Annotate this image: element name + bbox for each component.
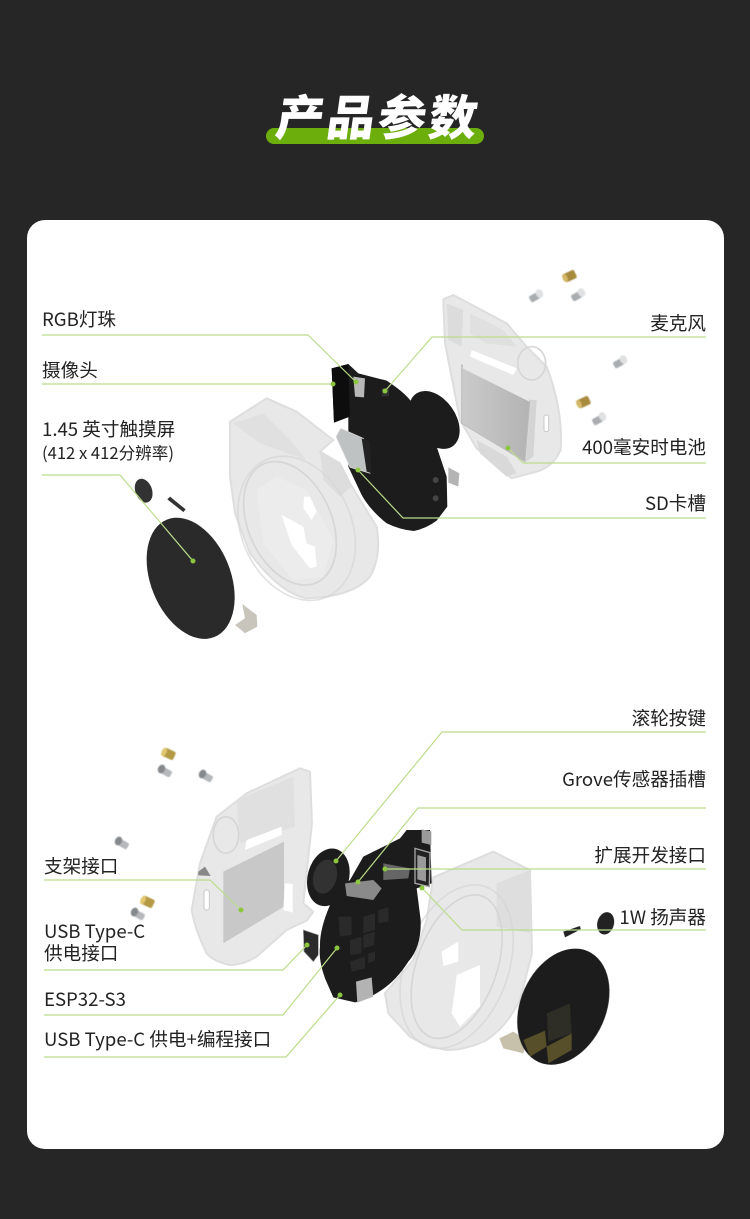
callout: 摄像头 <box>42 356 336 386</box>
icon: Grove connector <box>345 880 382 900</box>
icon: flex bracket <box>499 1032 527 1053</box>
callout: USB Type-C 供电+编程接口: USB Type-C 供电+编程接口 <box>44 1025 271 1052</box>
title: 产品参数 <box>272 79 486 149</box>
icon: speaker <box>415 848 430 887</box>
callout: 滚轮按键 <box>334 704 706 864</box>
callout: USB Type-C 供电接口 <box>44 917 310 970</box>
callout: 扩展开发接口 <box>382 841 706 872</box>
panel: white card <box>27 220 724 1149</box>
icon: flex bracket <box>235 604 257 633</box>
callout: USB Type-C 供电接口: 供电接口 <box>44 939 118 966</box>
icon: expansion header <box>383 863 410 880</box>
back shell: top assembly <box>443 295 561 478</box>
callout: 1W 扬声器 <box>420 886 706 930</box>
circuit board: bottom assembly <box>301 829 432 1003</box>
callout: 触摸屏: (412 x 412分辨率) <box>42 440 174 464</box>
callout: ESP32-S3 <box>44 946 340 1015</box>
front shell: bottom assembly <box>379 852 534 1064</box>
callout: RGB灯珠: RGB灯珠 <box>42 305 116 332</box>
icon: USB-C top connector <box>356 977 373 1003</box>
callout: SD卡槽 <box>356 468 706 518</box>
back shell: bottom assembly <box>192 768 313 965</box>
icon: battery <box>462 365 530 462</box>
callout: USB Type-C 供电+编程接口 <box>44 992 342 1057</box>
callout: 触摸屏 <box>42 415 196 564</box>
icon: RGB LED <box>353 377 365 397</box>
circuit board: top assembly <box>332 364 470 531</box>
callout: 400毫安时电池 <box>506 433 706 463</box>
callout: 麦克风 <box>382 309 706 394</box>
callout: USB Type-C 供电接口: USB Type-C <box>44 917 145 944</box>
front shell: top assembly <box>216 398 378 619</box>
display disc group <box>130 476 257 652</box>
display disc: bottom assembly <box>499 910 627 1079</box>
callout: ESP32-S3: ESP32-S3 <box>44 985 126 1012</box>
icon: SD card slot <box>336 428 370 473</box>
callout: 支架接口: 支架接口 <box>44 852 118 879</box>
callout: 扩展开发接口: 扩展开发接口 <box>594 841 706 868</box>
callout: Grove传感器插槽 <box>356 765 706 884</box>
title highlight bar <box>266 128 484 144</box>
callout: 麦克风: 麦克风 <box>650 309 706 336</box>
callout: 滚轮按键: 滚轮按键 <box>632 704 706 731</box>
callout: RGB灯珠 <box>42 305 358 384</box>
callout: 支架接口 <box>44 852 244 912</box>
icon: battery seen through shell <box>223 842 284 943</box>
screws and standoffs: bottom <box>113 747 214 921</box>
icon: shell window cut-outs <box>282 497 317 568</box>
callout: SD卡槽: SD卡槽 <box>645 489 706 516</box>
callout: Grove传感器插槽: Grove传感器插槽 <box>562 765 706 792</box>
callout: 触摸屏: 1.45 英寸触摸屏 <box>42 415 175 442</box>
icon: USB-C side connector <box>303 930 318 962</box>
callout: 1W 扬声器: 1W 扬声器 <box>619 903 706 930</box>
screws and standoffs: top <box>528 269 629 426</box>
icon: shell window cut-outs <box>442 942 480 1027</box>
callout: 摄像头: 摄像头 <box>42 356 98 383</box>
callout: 400毫安时电池: 400毫安时电池 <box>582 433 706 460</box>
